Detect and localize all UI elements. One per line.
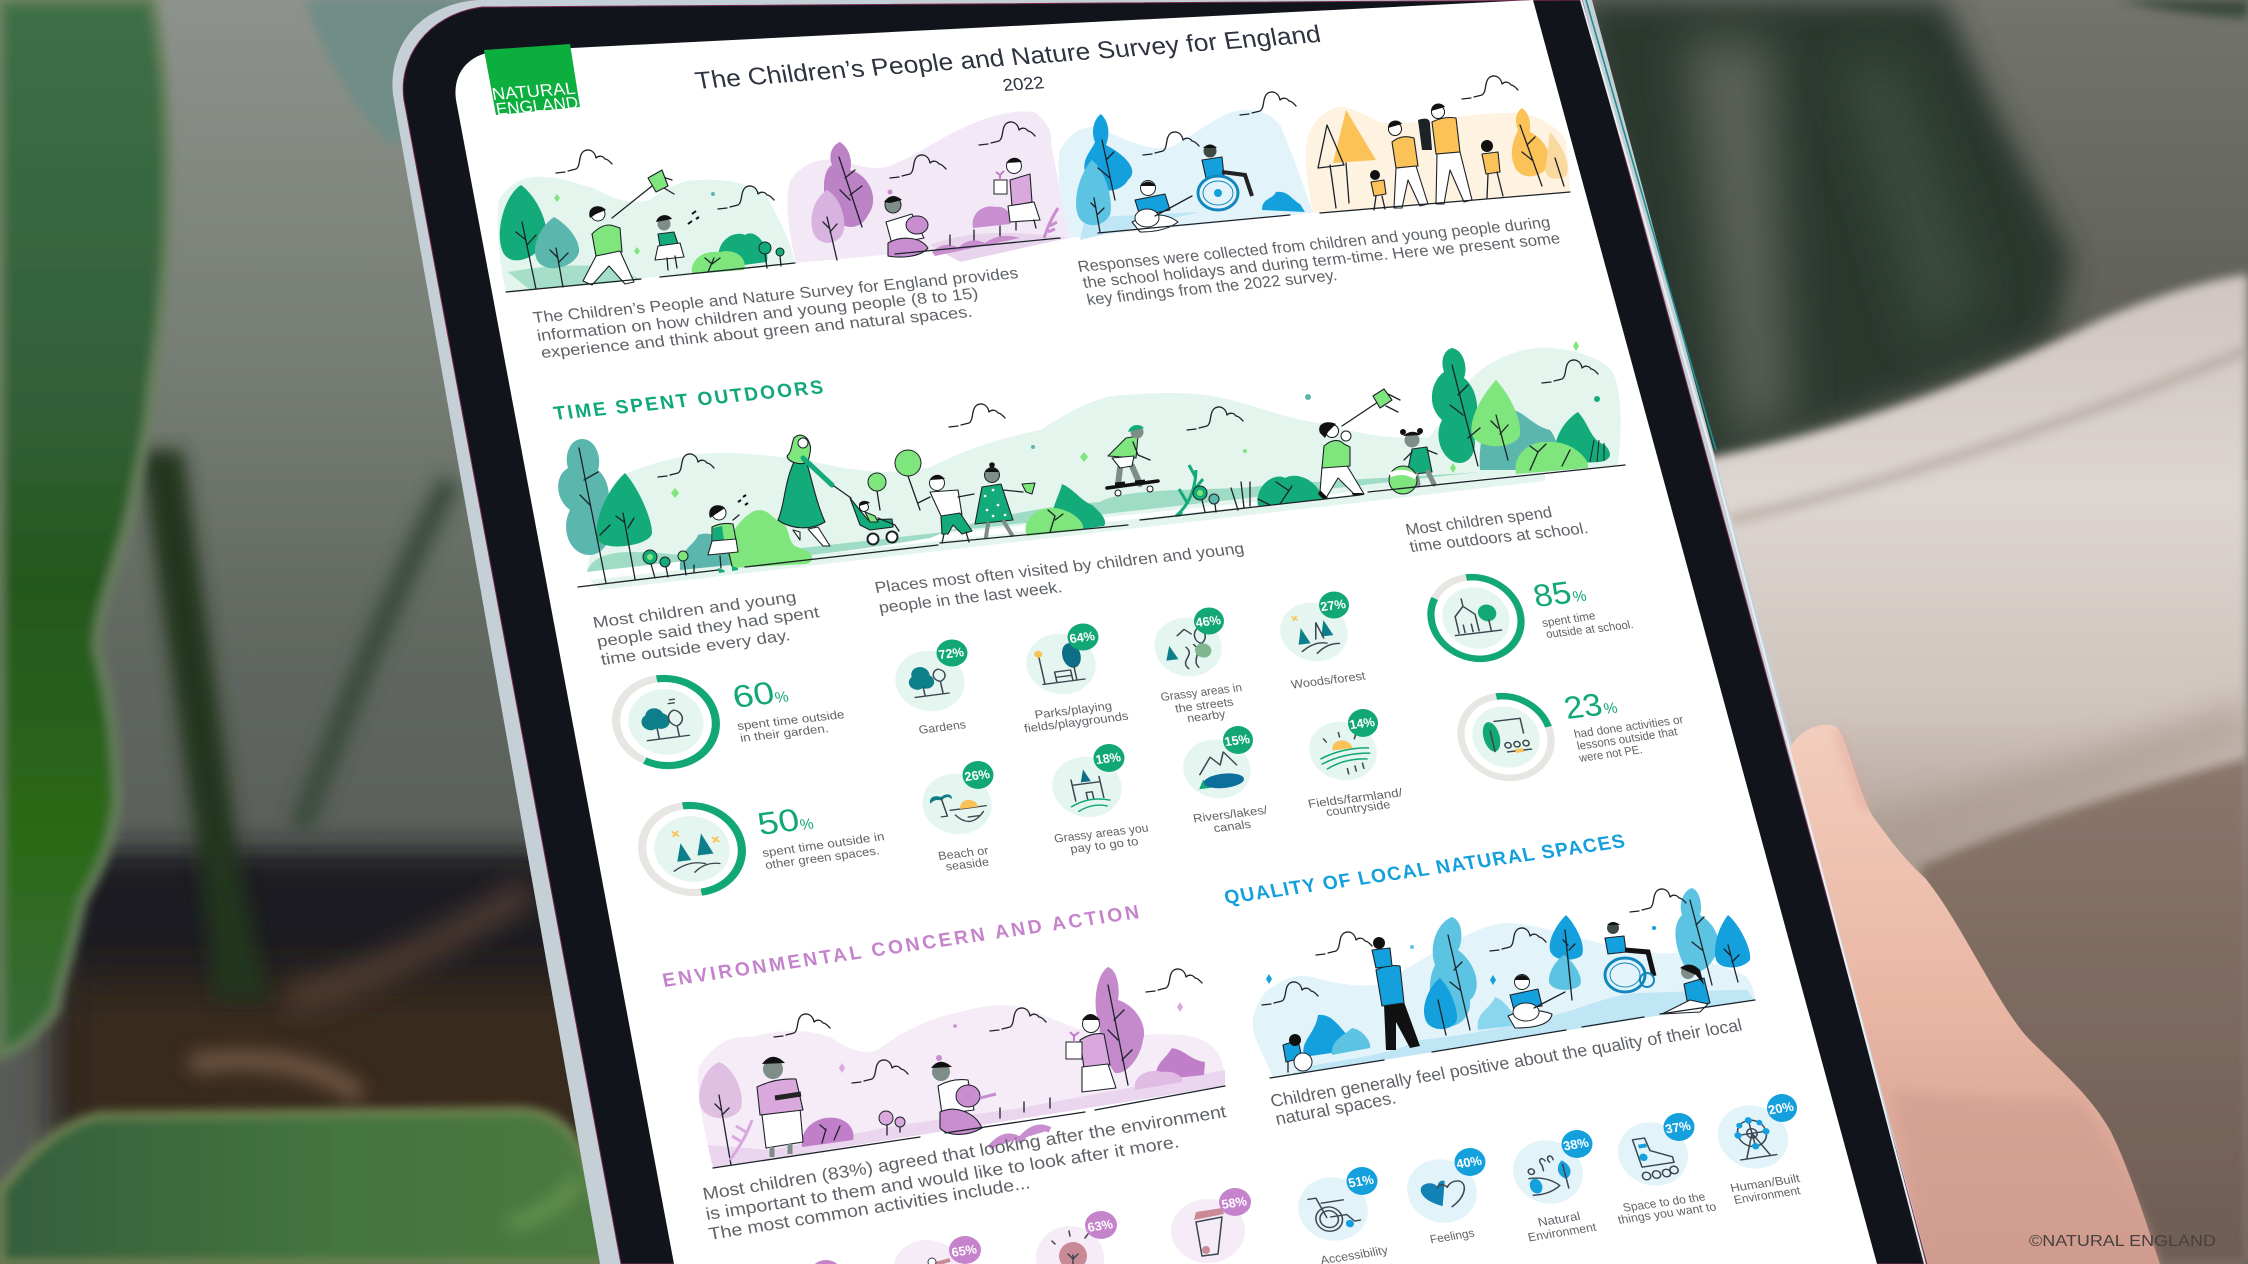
text: environment paragraph: [701, 1101, 1228, 1244]
text: places most visited: Places most often visited by children and young: [873, 540, 1246, 597]
figure: guitar player: [1508, 974, 1565, 1028]
figure: child with plant: [757, 1057, 803, 1157]
icon: beach 26%: 26%: [963, 767, 991, 784]
icon: parks 64%: [1020, 624, 1130, 735]
heading: quality of local natural spaces: QUALITY OF LOCAL NATURAL SPACES: [1222, 830, 1627, 909]
intro text: left: The Children’s People and Nature Survey for England provides: [532, 265, 1020, 327]
title: 2022: [1001, 72, 1046, 95]
icon: gardens 72%: [889, 640, 971, 737]
stat: 85 percent: %: [1571, 588, 1588, 606]
heading: time spent outdoors: TIME SPENT OUTDOORS: [552, 377, 825, 425]
icon: roller skate 37%: 37%: [1664, 1118, 1693, 1136]
title: The Children’s People and Nature Survey for England: [693, 21, 1323, 95]
icon: roller skate 37%: things you want to: [1616, 1200, 1718, 1227]
stat: 60 percent: spent time outside: [736, 708, 846, 733]
icon: grassy areas 46%: 46%: [1194, 613, 1222, 630]
icon: beach 26%: Beach or: [937, 844, 990, 863]
icon: natural environment 38%: [1506, 1130, 1598, 1244]
icon: 63% bulb: 63%: [1086, 1217, 1114, 1235]
figure: skateboarder: [1107, 425, 1158, 496]
figure: children and balloon: [895, 450, 1035, 543]
icon: grassy areas 46%: the streets: [1174, 696, 1235, 716]
icon: ferris wheel 20%: Human/Built: [1729, 1172, 1802, 1195]
icon: ferris wheel 20%: [1710, 1094, 1802, 1207]
stat: 85 percent: 85: [1530, 575, 1575, 614]
figure: reading child: [1662, 964, 1710, 1014]
icon: parks 64%: fields/playgrounds: [1023, 710, 1130, 735]
stat: 23 percent: [1560, 686, 1685, 765]
text: outside every day: [591, 589, 822, 669]
figure: wheelchair user: [1605, 922, 1654, 992]
text: environment paragraph: The most common activities include...: [707, 1172, 1032, 1244]
watermark: ©NATURAL ENGLAND: [2029, 1233, 2216, 1250]
text: outside every day: time outside every day.: [599, 627, 792, 669]
tablet screen: [455, 0, 1877, 1264]
stat: 50 percent: spent time outside in: [761, 830, 886, 860]
illustration: time outdoors: [558, 341, 1625, 590]
donut: 50% green spaces: [634, 800, 750, 898]
stat: 60 percent: [729, 675, 846, 745]
icon: feelings 40%: 40%: [1455, 1153, 1483, 1171]
illustration: environmental action: [698, 967, 1225, 1168]
icon: rivers 15%: Rivers/lakes/: [1192, 804, 1269, 825]
figure: woman with stroller: [778, 435, 899, 546]
figure: child with pot: [1066, 1014, 1116, 1092]
intro text: left: [532, 265, 1020, 362]
figure: kneeling child with watering can: [931, 1055, 996, 1134]
icon: fields 14%: [1303, 709, 1405, 819]
tablet body: [392, 0, 1932, 1264]
icon: 58% bin: 58%: [1220, 1194, 1248, 1212]
figure: adult carrying child: [1372, 937, 1420, 1050]
icon: ferris wheel 20%: Environment: [1732, 1184, 1802, 1207]
icon row: environmental activities: [809, 1188, 1251, 1264]
stat: 23 percent: had done activities or: [1573, 713, 1685, 741]
stat: 60 percent: 60: [729, 675, 777, 715]
figure: girl with ball: [1389, 428, 1437, 494]
icon: grassy areas 46%: [1148, 608, 1243, 725]
icon: rivers 15%: canals: [1212, 818, 1252, 835]
icon: paid grassy areas 18%: Grassy areas you: [1053, 822, 1150, 846]
icon: accessibility 51%: 51%: [1347, 1172, 1375, 1190]
text: outside every day: Most children and young: [591, 589, 798, 632]
icon: paid grassy areas 18%: pay to go to: [1069, 835, 1140, 856]
icon: paid grassy areas 18%: 18%: [1094, 750, 1122, 767]
icon: roller skate 37%: Space to do the: [1621, 1190, 1707, 1215]
scene: blue guitar and wheelchair: [1058, 92, 1313, 240]
icon: rivers 15%: [1177, 726, 1269, 835]
stat: 85 percent: [1530, 575, 1635, 641]
intro text: left: experience and think about green and natural spaces.: [540, 304, 974, 362]
hand: [1790, 725, 2160, 1264]
scene: orange family walk: [1306, 76, 1570, 213]
stat: 60 percent: %: [773, 688, 790, 707]
illustration: quality of local natural spaces: [1253, 888, 1755, 1078]
icon: ferris wheel 20%: 20%: [1766, 1099, 1796, 1117]
intro text: left: information on how children and young people (8 to 15): [536, 285, 980, 345]
icon: gardens 72%: Gardens: [918, 718, 967, 737]
icon: grassy areas 46%: Grassy areas in: [1159, 681, 1243, 704]
icon: fields 14%: 14%: [1348, 715, 1376, 732]
donut: 85% school: [1422, 572, 1530, 664]
figure: boy with kite: [1318, 389, 1400, 499]
text: quality paragraph: Children generally feel positive about the quality of their local: [1268, 1015, 1744, 1111]
stat: 50 percent: [754, 802, 886, 872]
icon: woods 27%: 27%: [1319, 597, 1347, 614]
stat: 50 percent: other green spaces.: [764, 844, 881, 872]
icon: beach 26%: [916, 761, 998, 874]
text: outdoors at school: Most children spend: [1404, 504, 1554, 539]
stat: 50 percent: %: [798, 815, 815, 834]
text: places most visited: [873, 540, 1246, 617]
stat: 60 percent: in their garden.: [739, 722, 830, 745]
stat: 23 percent: lessons outside that: [1576, 725, 1679, 753]
stat: 23 percent: were not PE.: [1577, 743, 1644, 765]
ground wash under the line: [590, 473, 1545, 590]
donut: 60% garden: [608, 673, 724, 771]
figure: girl with bubbles: [708, 495, 748, 573]
stat: 85 percent: outside at school.: [1545, 618, 1635, 641]
icon: natural environment 38%: Natural: [1537, 1210, 1582, 1229]
stat: 23 percent: 23: [1560, 686, 1606, 726]
donut: 23% lessons: [1452, 691, 1560, 783]
icon: 65%: 65%: [950, 1242, 978, 1260]
text: environment paragraph: is important to them and would like to look after it more.: [704, 1131, 1181, 1224]
icon: fields 14%: Fields/farmland/: [1307, 786, 1405, 811]
icon: paid grassy areas 18%: [1046, 744, 1150, 856]
intro text: right: the school holidays and during term-time. Here we present some: [1081, 230, 1562, 292]
icon: fields 14%: countryside: [1325, 798, 1392, 819]
icon: woods 27%: [1274, 592, 1367, 692]
text: outdoors at school: time outdoors at school.: [1408, 520, 1590, 556]
icon: 65%: [893, 1236, 981, 1264]
stat: 50 percent: 50: [754, 802, 802, 842]
icon: first activity: [809, 1260, 843, 1264]
icon: 58% bin: [1171, 1188, 1251, 1263]
text: outside every day: people said they had spent: [595, 604, 822, 651]
icon: natural environment 38%: 38%: [1562, 1135, 1591, 1153]
stat: 85 percent: spent time: [1541, 609, 1597, 630]
icon: beach 26%: seaside: [945, 856, 990, 874]
logo: Natural England: NATURAL: [490, 78, 577, 104]
text: outdoors at school: [1404, 504, 1590, 556]
intro text: right: Responses were collected from children and young people during: [1076, 214, 1552, 276]
icon: natural environment 38%: Environment: [1527, 1221, 1598, 1244]
icon: rivers 15%: 15%: [1223, 732, 1251, 749]
intro text: right: [1076, 214, 1562, 309]
scene: purple planting: [787, 111, 1070, 263]
icon: woods 27%: Woods/forest: [1290, 669, 1367, 692]
figure: child with ball: [1283, 1034, 1312, 1072]
logo: Natural England: [484, 44, 580, 119]
flowers: [643, 550, 694, 578]
stat: 23 percent: %: [1602, 700, 1620, 718]
text: environment paragraph: Most children (83%) agreed that looking after the environment: [701, 1101, 1228, 1204]
icon: grassy areas 46%: nearby: [1186, 708, 1227, 725]
icon: 63% bulb: [1036, 1211, 1117, 1264]
intro text: right: key findings from the 2022 survey.: [1085, 267, 1339, 309]
logo: Natural England: ENGLAND: [494, 92, 580, 119]
icon: parks 64%: Parks/playing: [1034, 699, 1113, 722]
icon: feelings 40%: Feelings: [1429, 1227, 1476, 1246]
icon: parks 64%: 64%: [1068, 629, 1096, 646]
icon: roller skate 37%: [1610, 1113, 1718, 1227]
icon: feelings 40%: [1400, 1148, 1486, 1246]
text: places most visited: people in the last week.: [877, 579, 1064, 617]
heading: environmental concern and action: ENVIRONMENTAL CONCERN AND ACTION: [661, 902, 1141, 992]
icon: gardens 72%: 72%: [937, 645, 965, 662]
icon: accessibility 51%: [1292, 1167, 1389, 1264]
top illustration strip: [498, 76, 1570, 292]
text: quality paragraph: natural spaces.: [1273, 1087, 1398, 1129]
scene: green kite: [498, 150, 795, 292]
